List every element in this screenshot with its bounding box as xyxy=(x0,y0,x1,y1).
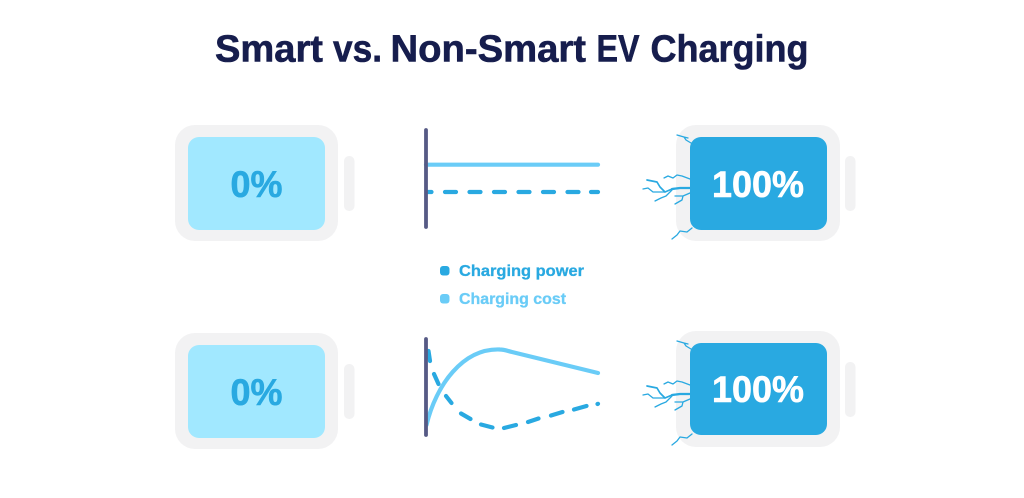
battery: bottom left empty: 0% xyxy=(230,372,282,413)
title: Charging xyxy=(650,28,808,70)
battery: bottom right full xyxy=(643,331,856,447)
battery: top right full xyxy=(643,125,856,241)
axis xyxy=(424,130,428,227)
charging power dashed curve xyxy=(428,351,598,428)
title xyxy=(215,28,808,70)
icon: lightning cracks xyxy=(643,135,692,239)
axis xyxy=(424,339,428,435)
charging cost curve xyxy=(426,349,598,425)
chart: non-smart charging xyxy=(426,339,598,435)
charging cost line xyxy=(426,163,598,167)
chart: smart charging xyxy=(426,130,598,227)
battery: top right full: 100% xyxy=(712,164,804,205)
icon: lightning cracks xyxy=(643,341,692,445)
battery: bottom left empty xyxy=(175,333,354,449)
title: EV xyxy=(596,28,640,70)
title: vs. xyxy=(333,28,382,70)
title: Non-Smart xyxy=(390,28,586,70)
legend item: charging power: Charging power xyxy=(459,263,584,280)
battery: top left empty: 0% xyxy=(230,164,282,205)
legend xyxy=(440,263,584,308)
battery: top left empty xyxy=(175,125,354,241)
legend item: charging cost: Charging cost xyxy=(459,291,567,308)
title: Smart xyxy=(215,28,323,70)
battery: bottom right full: 100% xyxy=(712,369,804,410)
charging power dashed line xyxy=(427,190,598,194)
